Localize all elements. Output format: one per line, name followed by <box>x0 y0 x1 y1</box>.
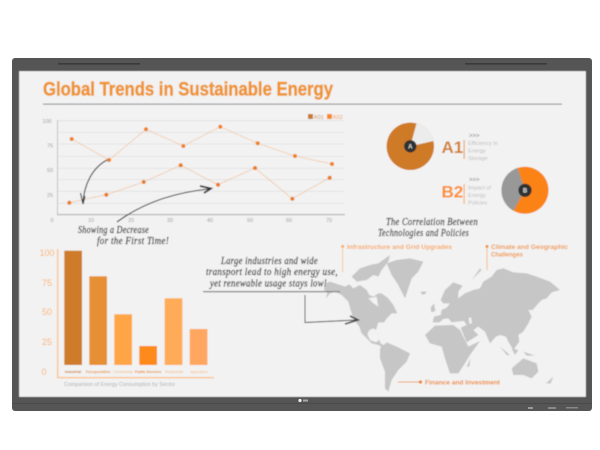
arrow: to K01 dip <box>80 160 107 204</box>
axis labels: 70 <box>326 218 332 224</box>
pie B <box>501 167 548 214</box>
map label: climate: Climate and Geographic <box>491 245 569 251</box>
series K02 <box>67 163 332 205</box>
bar chart: Agriculture <box>190 370 208 374</box>
label A1: >>> <box>469 134 480 140</box>
annotation: decrease: Showing a Decrease <box>78 225 149 236</box>
axis labels: 30 <box>167 218 173 224</box>
monitor frame <box>12 58 592 411</box>
axis labels: 40 <box>207 218 213 224</box>
map label: infrastructure: Infrastructure and Grid Upgrades <box>347 245 453 251</box>
map label: finance <box>398 380 500 386</box>
label B2: Policies <box>468 200 487 206</box>
label A1: Energy <box>468 148 486 154</box>
annotation: decrease: for the First Time! <box>97 236 169 247</box>
axis labels: 60 <box>286 218 292 224</box>
bar labels <box>39 248 55 377</box>
bar chart: Public Services <box>135 370 161 374</box>
arrow: callout to map <box>305 295 358 324</box>
series K01 <box>70 125 334 166</box>
callout: energy use <box>203 256 340 292</box>
annotation: decrease <box>78 225 169 247</box>
map label: finance: Finance and Investment <box>425 380 500 386</box>
axis labels: 50 <box>47 168 53 174</box>
axis labels: 75 <box>47 144 53 150</box>
callout: energy use: transport lead to high energy use, <box>206 267 338 278</box>
map label: climate <box>486 245 569 270</box>
axis labels: 50 <box>247 218 253 224</box>
title rule <box>43 104 562 105</box>
bar labels: 100 <box>39 248 55 258</box>
axis labels: 0 <box>50 218 54 224</box>
legend: K02 <box>333 115 343 121</box>
bar chart: Comparison of Energy Consumption by Sector <box>64 382 175 388</box>
label A1: Storage <box>468 156 488 162</box>
label B2: >>> <box>469 178 480 184</box>
bar chart: Residential <box>165 370 183 374</box>
label A1 <box>442 134 498 162</box>
axis labels: 100 <box>42 119 52 125</box>
map label: climate: Challenges <box>491 252 524 258</box>
axis labels: 10 <box>88 218 94 224</box>
bar labels: 25 <box>42 337 52 347</box>
map heading: Technologies and Policies <box>378 228 469 239</box>
map label: infrastructure <box>341 245 453 272</box>
bar chart: Transportation <box>85 370 111 374</box>
callout: energy use: Large industries and wide <box>220 256 318 267</box>
legend: K01 <box>314 115 324 121</box>
legend <box>308 114 343 121</box>
label B2: B2 <box>442 182 463 202</box>
label B2: Impact of <box>468 186 491 192</box>
bar labels: 50 <box>42 307 52 317</box>
callout: energy use: yet renewable usage stays low! <box>209 278 327 290</box>
axis labels: 25 <box>47 193 53 199</box>
bar chart: Industrial <box>65 370 81 374</box>
map heading <box>378 217 478 239</box>
world map <box>324 255 560 392</box>
label B2 <box>442 178 491 206</box>
arrow: to K02 dip <box>117 186 211 222</box>
map heading: The Correlation Between <box>386 217 478 228</box>
screen <box>19 71 586 397</box>
label B2: Energy <box>468 193 486 199</box>
pie B: B <box>523 189 528 195</box>
line chart <box>42 114 345 224</box>
title: Global Trends in Sustainable Energy <box>43 80 333 100</box>
pie A <box>387 123 434 170</box>
label A1: A1 <box>442 138 463 157</box>
bar chart <box>39 248 214 388</box>
bar labels: 0 <box>41 367 47 377</box>
axis labels <box>42 119 332 224</box>
pie A: A <box>408 144 413 150</box>
label A1: Efficiency in <box>468 141 498 147</box>
bar chart: Commercial <box>113 370 133 374</box>
axis labels: 20 <box>128 218 134 224</box>
bar labels: 75 <box>42 278 52 288</box>
